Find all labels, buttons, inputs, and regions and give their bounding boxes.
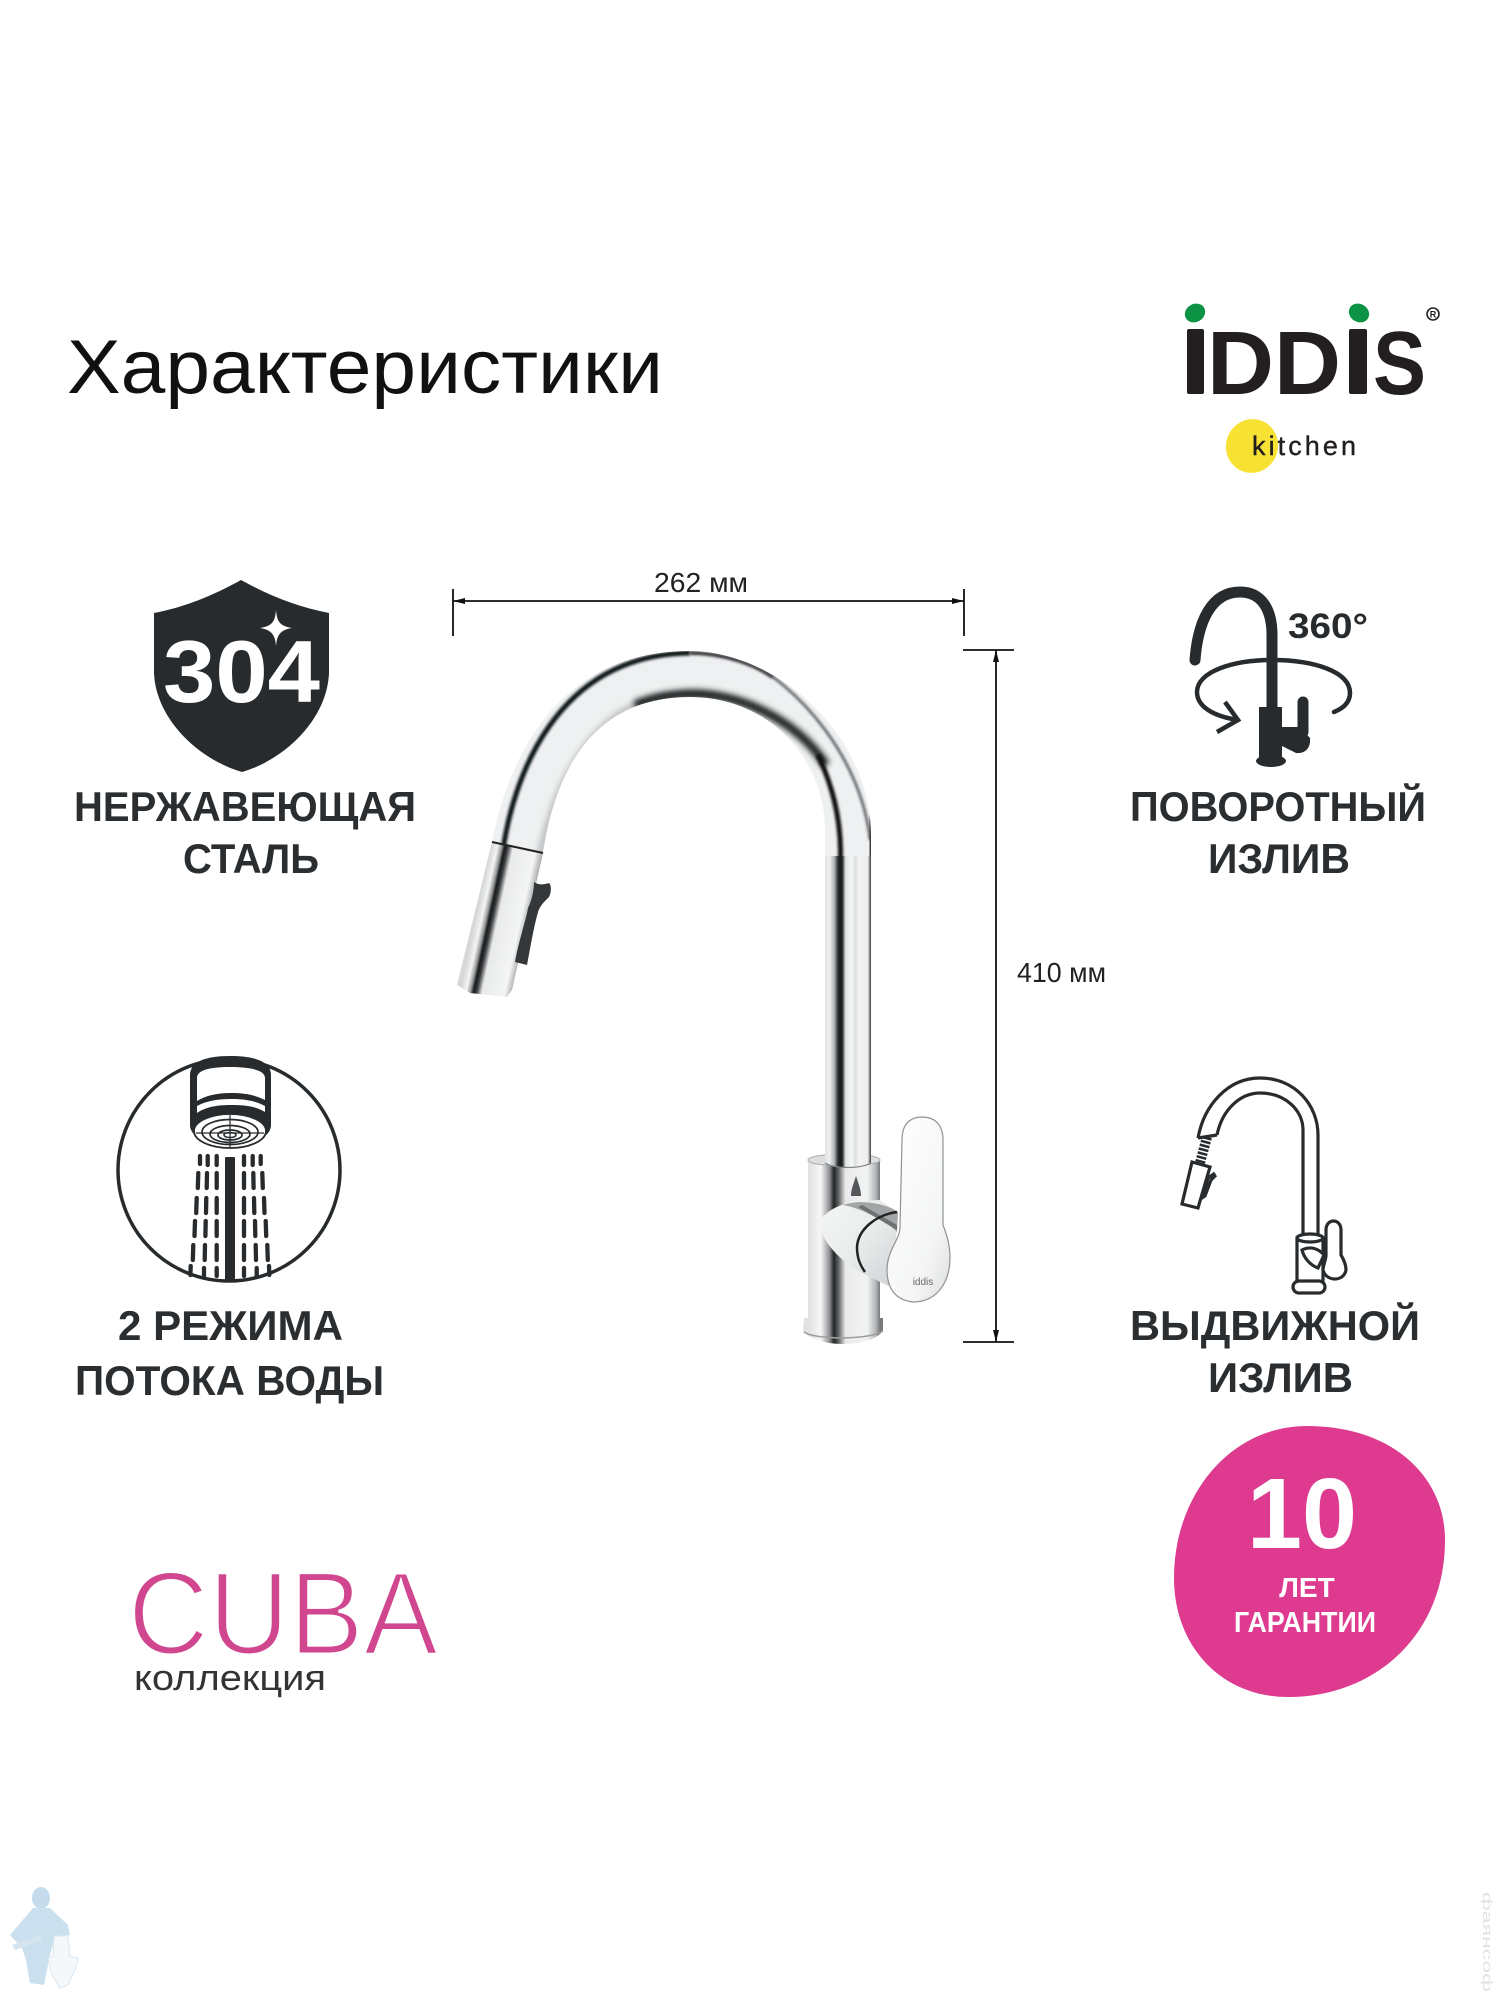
drop reflection above lever — [851, 1176, 861, 1196]
dimension: height 410 mm — [963, 650, 1106, 1342]
logo: IDDIS kitchen — [1181, 300, 1439, 480]
label: swivel spout: ПОВОРОТНЫЙ — [1130, 782, 1426, 830]
pull-out spray head — [457, 842, 543, 997]
label: two water flow modes: 2 РЕЖИМА — [118, 1302, 343, 1349]
label: pull-out spout — [1130, 1301, 1420, 1401]
straight tube — [825, 856, 871, 1160]
label: swivel spout — [1130, 782, 1426, 882]
label: stainless steel — [74, 783, 416, 882]
label: stainless steel: НЕРЖАВЕЮЩАЯ — [74, 783, 416, 830]
faucet body — [808, 1160, 880, 1326]
mixer lever barrel — [819, 1200, 898, 1288]
watermark: vertical site name: фаянсоф — [1480, 1892, 1495, 1993]
logo: IDDIS kitchen: S — [1373, 314, 1426, 414]
label: swivel spout: ИЗЛИВ — [1208, 835, 1350, 882]
label: stainless steel: СТАЛЬ — [183, 835, 319, 882]
title: Характеристики — [67, 325, 663, 410]
icon: swivel spout 360: 360° — [1288, 607, 1368, 646]
spout arch — [492, 651, 871, 856]
badge: 10 year warranty: ГАРАНТИИ — [1234, 1607, 1376, 1639]
faucet product image: iddis — [913, 1277, 933, 1288]
logo: IDDIS kitchen: D — [1207, 314, 1274, 414]
badge: 10 year warranty: 10 — [1247, 1458, 1357, 1570]
icon: 304 stainless steel shield — [154, 580, 329, 772]
dimension: width 262 mm — [453, 567, 964, 636]
dimension: width 262 mm: 262 мм — [654, 567, 748, 598]
badge: 10 year warranty — [1174, 1426, 1445, 1697]
logo: IDDIS kitchen: kitchen — [1252, 431, 1359, 461]
dimension: height 410 mm: 410 мм — [1017, 957, 1106, 988]
label: two water flow modes: ПОТОКА ВОДЫ — [75, 1357, 384, 1404]
icon: pull-out spout — [1182, 1078, 1346, 1293]
logo: IDDIS kitchen: D — [1274, 314, 1341, 414]
watermark: plumber with toilet — [10, 1887, 78, 1988]
logo: IDDIS kitchen: R — [1430, 310, 1437, 320]
label: pull-out spout: ВЫДВИЖНОЙ — [1130, 1301, 1420, 1349]
icon: swivel spout 360 — [1195, 592, 1368, 767]
label: pull-out spout: ИЗЛИВ — [1208, 1354, 1353, 1401]
faucet product image — [457, 651, 950, 1344]
spray head trigger — [515, 882, 551, 965]
badge: 10 year warranty: ЛЕТ — [1279, 1572, 1335, 1603]
mixer handle — [887, 1117, 950, 1302]
icon: aerator with two water flow modes — [118, 1056, 340, 1282]
base flange — [803, 1318, 883, 1344]
collection name: CUBA: CUBA — [128, 1548, 438, 1680]
label: two water flow modes — [75, 1302, 384, 1404]
icon: 304 stainless steel shield: 304 — [163, 622, 320, 721]
collection name: CUBA: коллекция — [134, 1657, 326, 1698]
